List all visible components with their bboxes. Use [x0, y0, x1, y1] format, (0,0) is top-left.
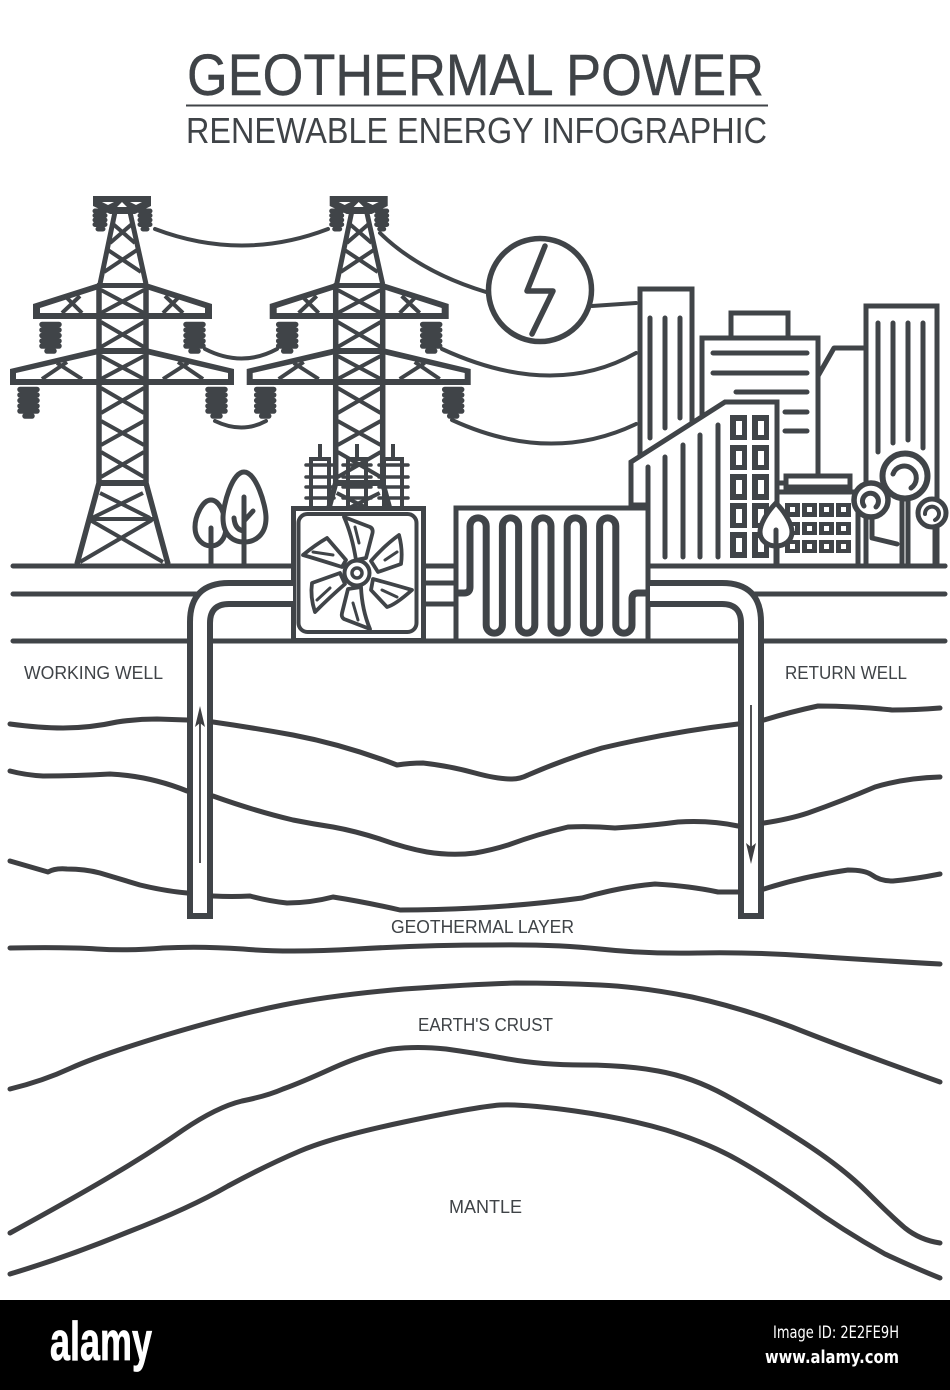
building: right tower [866, 306, 937, 566]
power wires [155, 229, 636, 444]
earth crust upper boundary [10, 983, 940, 1089]
cooling fan box [294, 508, 424, 640]
label: return well: RETURN WELL [785, 662, 907, 683]
footer url: www.alamy.com [765, 1347, 899, 1368]
footer logo: alamy [50, 1310, 152, 1372]
icon: city trees [760, 454, 946, 565]
trees near tower [195, 472, 266, 565]
transmission tower right [247, 196, 471, 564]
label: earth's crust: EARTH'S CRUST [418, 1014, 553, 1035]
transformer insulators [306, 444, 408, 507]
rock strata near surface [10, 706, 940, 910]
arrow down [746, 705, 756, 864]
label: working well: WORKING WELL [24, 662, 163, 683]
label: mantle: MANTLE [449, 1196, 522, 1217]
icon: electricity circle with lightning bolt [488, 238, 592, 342]
subtitle: RENEWABLE ENERGY INFOGRAPHIC [186, 110, 767, 151]
mantle upper boundary [10, 1105, 940, 1278]
footer image id: Image ID: 2E2FE9H [773, 1323, 899, 1343]
fan hub [344, 560, 370, 586]
geothermal layer boundary [10, 945, 940, 964]
building: front slanted [631, 402, 777, 640]
earth crust lower boundary [10, 1048, 940, 1243]
building: back low block [818, 348, 864, 376]
serpentine coil [456, 518, 648, 633]
footer bar [0, 1300, 950, 1390]
ground and surface lines [13, 566, 945, 641]
building: tall tower [640, 289, 692, 464]
connecting pipes between components [424, 583, 456, 604]
city buildings [631, 289, 946, 640]
title rule [186, 104, 768, 106]
return well pipe [650, 583, 761, 916]
working well pipe [190, 583, 293, 916]
building: small low block [777, 476, 858, 566]
city ground line [650, 564, 945, 568]
fan blades [303, 517, 412, 629]
label: geothermal layer: GEOTHERMAL LAYER [391, 916, 574, 937]
building: office with roof [702, 313, 818, 483]
heat exchanger box [456, 508, 648, 641]
arrow up [195, 706, 205, 863]
transmission tower left [10, 196, 234, 564]
title: GEOTHERMAL POWER [187, 43, 764, 108]
